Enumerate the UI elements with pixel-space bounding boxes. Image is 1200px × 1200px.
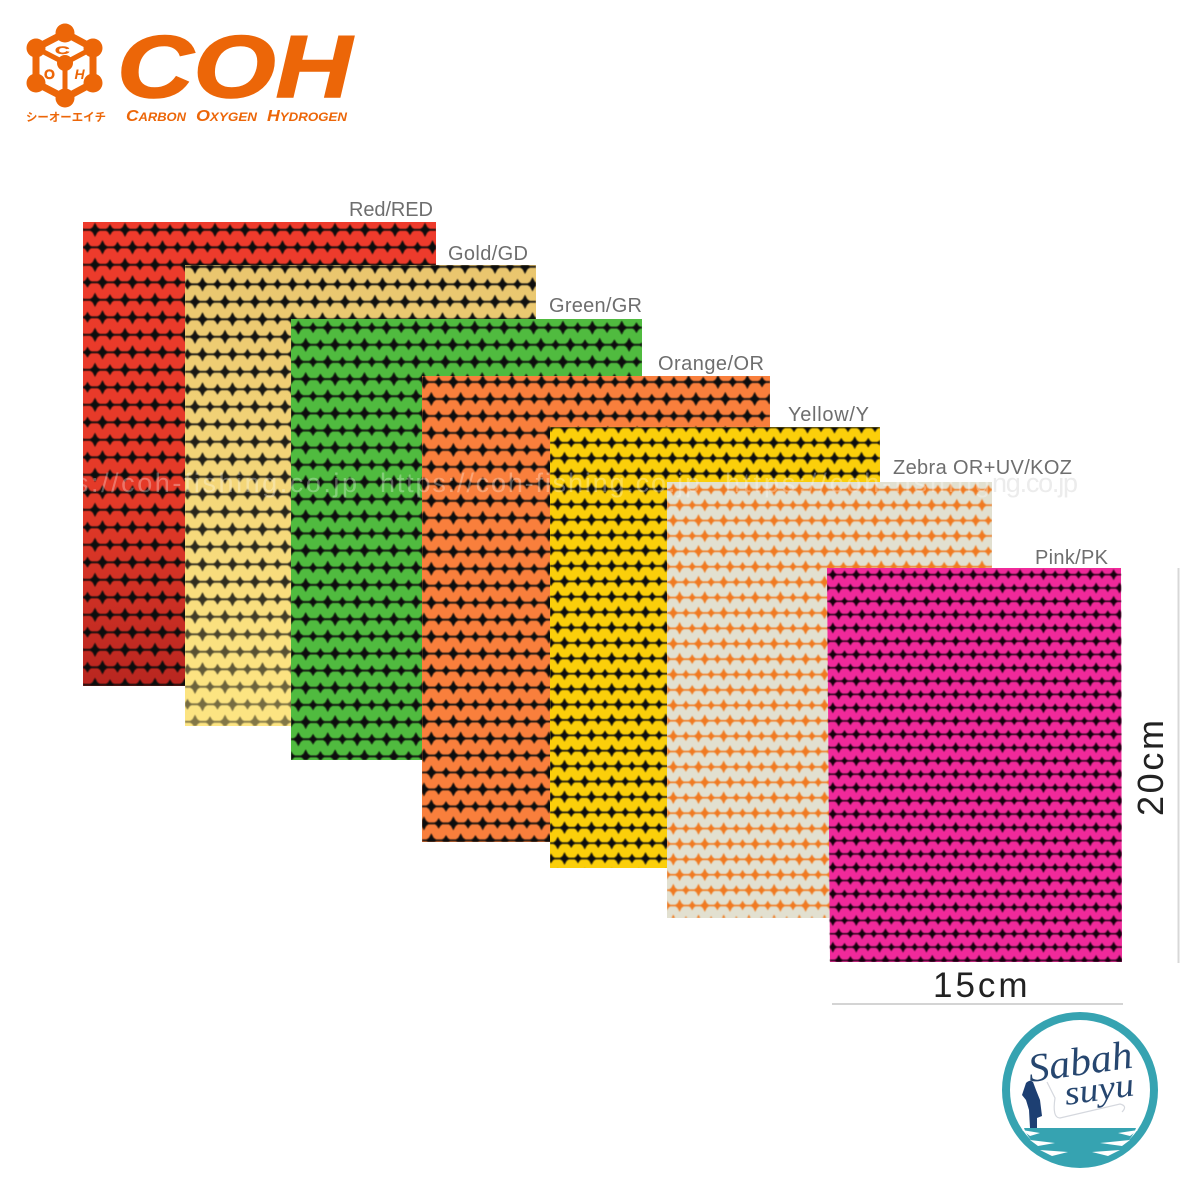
label: Pink: Pink/PK: [1035, 547, 1109, 569]
dimension: width 15cm: 15cm: [933, 966, 1031, 1005]
label: Gold: Gold/GD: [448, 243, 528, 265]
logo: COH brand mark: [26, 17, 355, 125]
badge: Sabah Suyu: [1006, 1016, 1154, 1165]
icon: fisherman: [1022, 1081, 1042, 1128]
katakana tagline: シーオーエイチ: [26, 111, 106, 124]
tagline: Carbon Oxygen Hydrogen: OXYGEN: [196, 108, 257, 125]
watermark: https://coh-fishing.co.jp: [380, 468, 700, 498]
brand text: suyu: suyu: [1062, 1067, 1136, 1113]
sheet: Yellow: [550, 427, 880, 868]
water: [1024, 1128, 1136, 1165]
brand text: Sabah: Sabah: [1025, 1032, 1135, 1091]
watermark: s://coh-fishing.co.jp: [75, 468, 357, 498]
sheet: Orange: [422, 376, 770, 842]
tagline: Carbon Oxygen Hydrogen: [126, 108, 347, 125]
sheet: Gold: [185, 265, 536, 726]
icon: molecule cube: C: [55, 44, 70, 57]
colour labels: [349, 199, 1109, 569]
dimension: height 20cm: 20cm: [1130, 720, 1171, 816]
icon: molecule cube: [26, 24, 102, 108]
sheets stack: [83, 222, 1122, 962]
fishing line: [1047, 1082, 1125, 1118]
sheet: Green: [291, 319, 642, 760]
label: Yellow: Yellow/Y: [788, 404, 869, 426]
sheet: Red: [83, 222, 436, 686]
label: Green: Green/GR: [549, 295, 642, 317]
sheet: Zebra: [667, 482, 992, 918]
sheet: Pink: [827, 568, 1122, 962]
label: Zebra: Zebra OR+UV/KOZ: [893, 457, 1072, 479]
tagline: Carbon Oxygen Hydrogen: HYDROGEN: [267, 108, 347, 125]
icon: molecule cube: H: [74, 66, 85, 82]
wordmark: COH: COH: [117, 17, 355, 116]
label: Red: Red/RED: [349, 199, 433, 221]
icon: molecule cube: O: [44, 66, 55, 82]
label: Orange: Orange/OR: [658, 353, 764, 375]
watermark: ng.co.jp: [992, 468, 1078, 498]
tagline: Carbon Oxygen Hydrogen: CARBON: [126, 108, 186, 125]
watermark: https://coh-fishing: [725, 468, 990, 498]
watermark: [75, 468, 1078, 498]
